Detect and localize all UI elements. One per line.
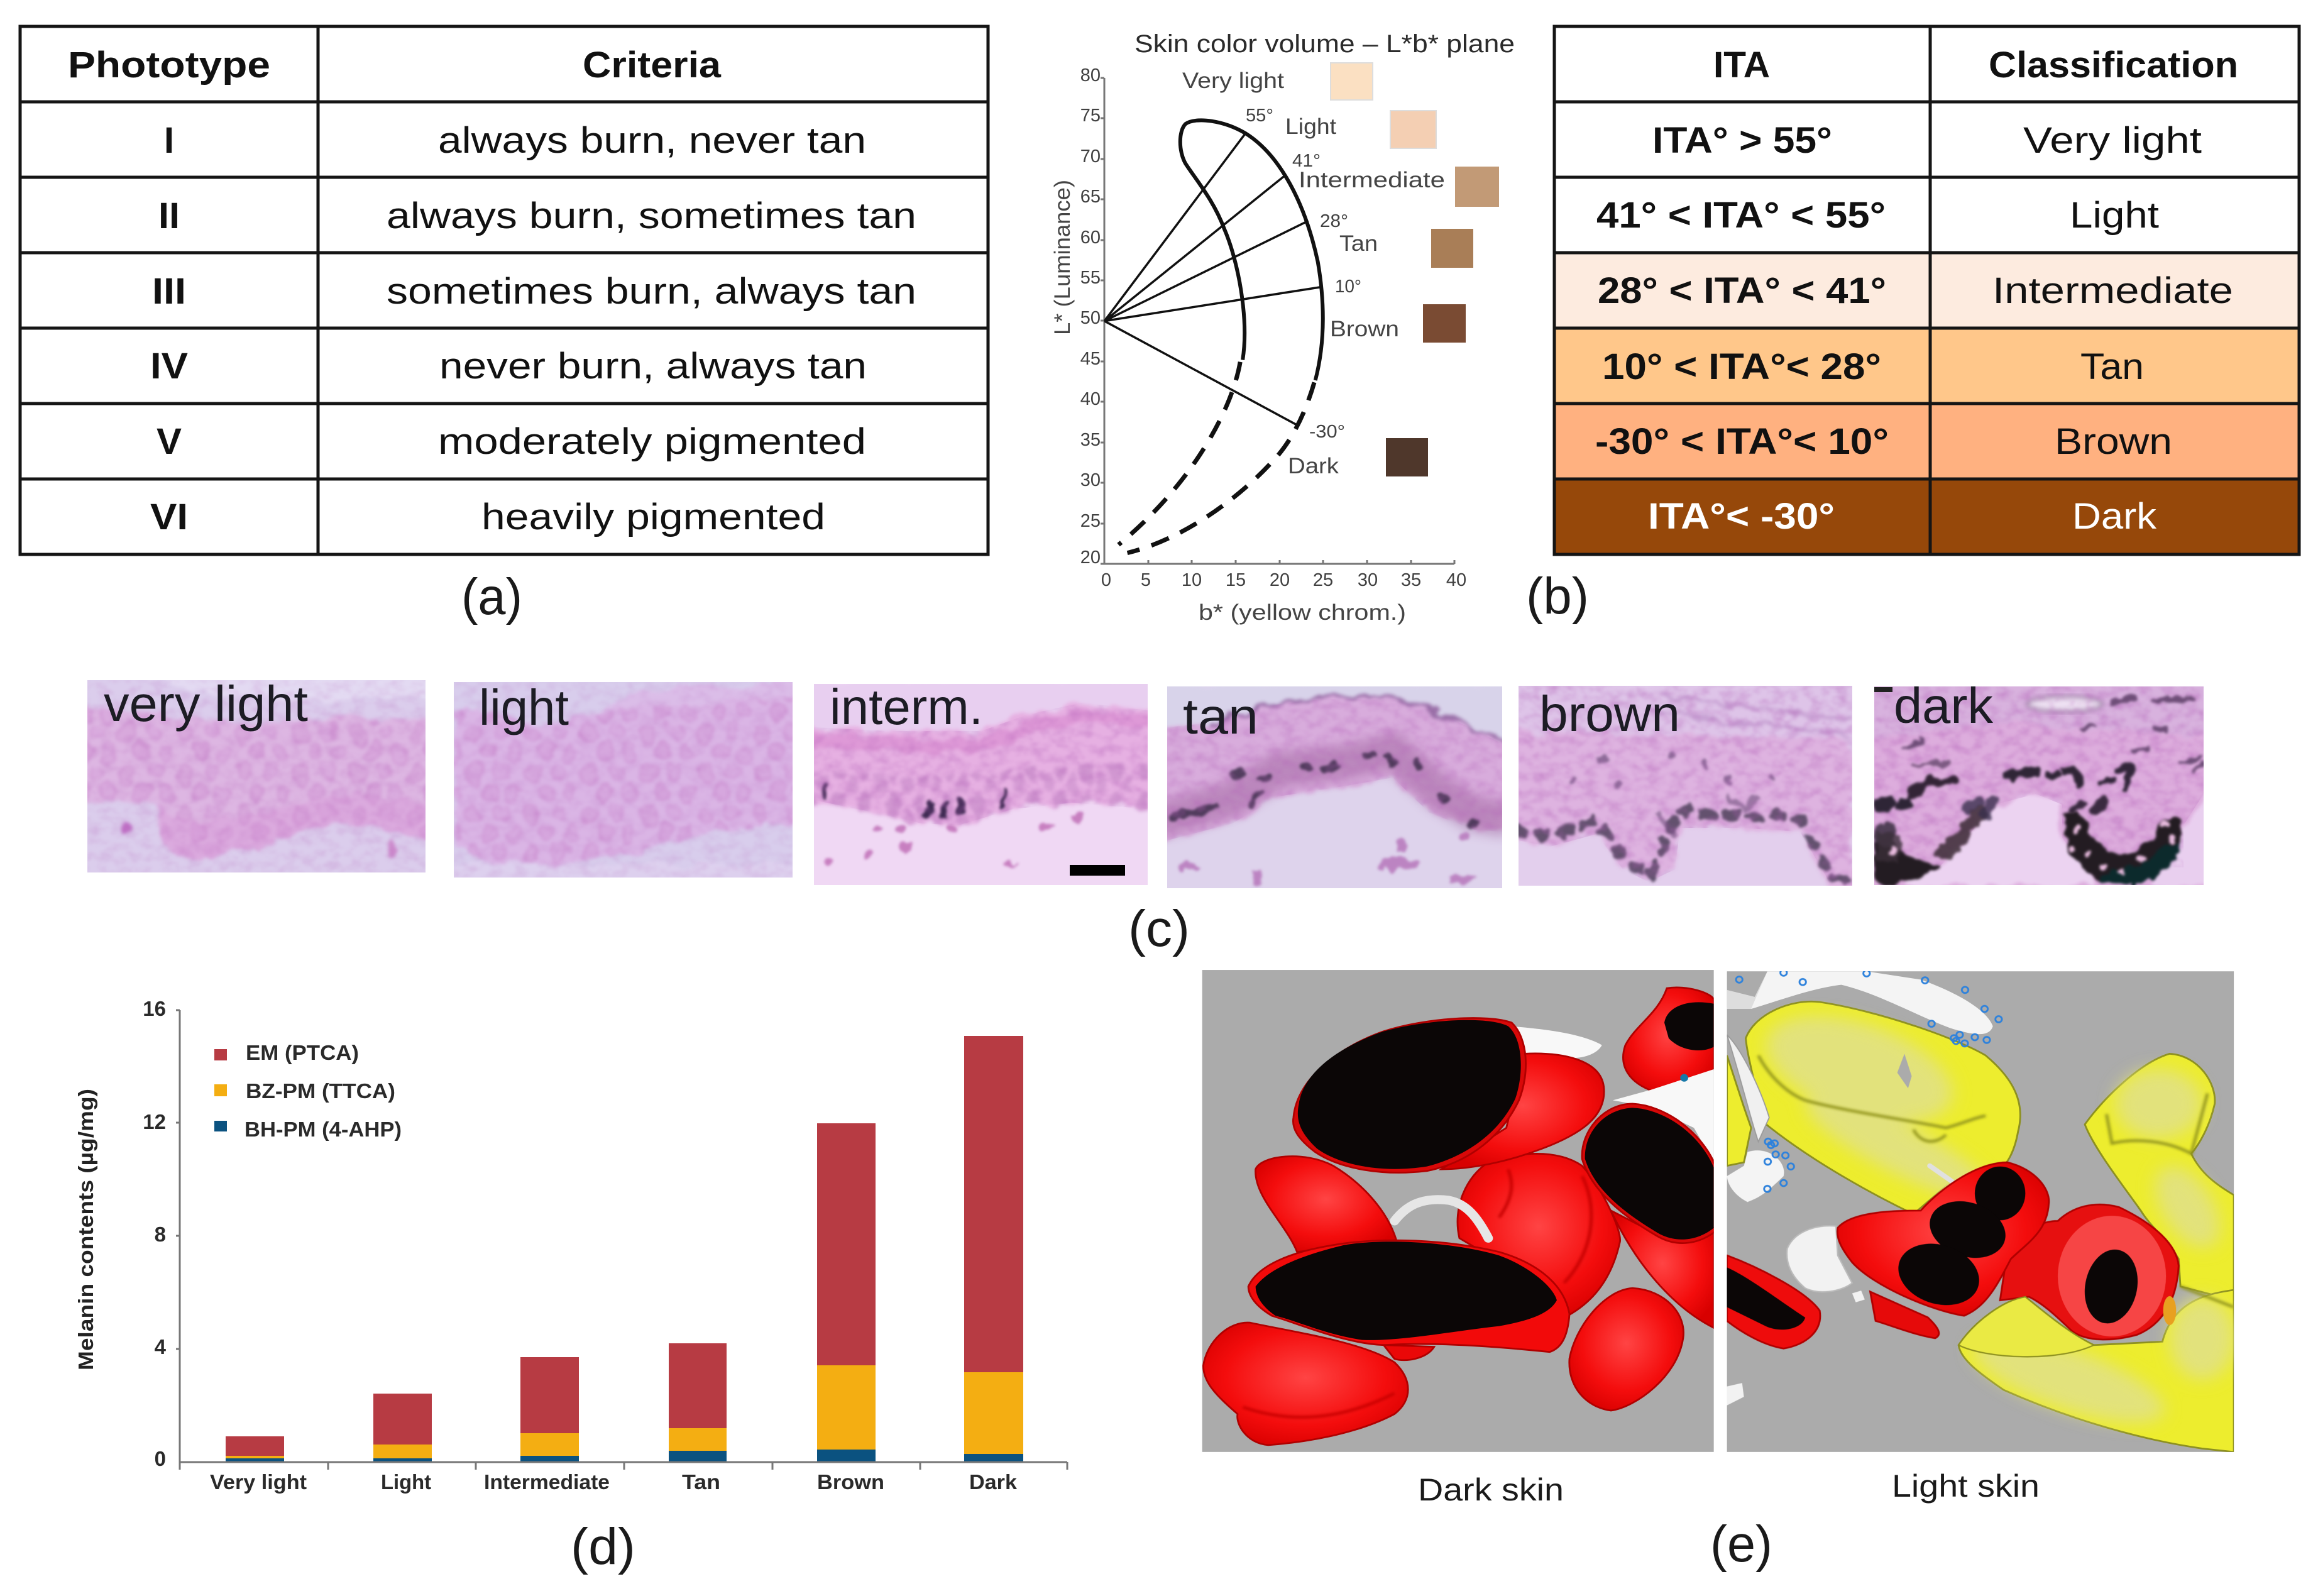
category and angle labels: [1182, 69, 1445, 478]
row: dark: [1648, 496, 2157, 537]
legend: [214, 1041, 402, 1141]
y axis tick labels: 75: [1080, 106, 1101, 126]
bar: Light: [373, 1394, 432, 1462]
row III: III: [152, 271, 186, 312]
row V: V: [157, 421, 182, 462]
row: intermediate: 28° < ITA° < 41°: [1598, 270, 1886, 311]
y axis tick labels: 4: [155, 1335, 167, 1358]
category and angle labels: Light: [1285, 114, 1336, 139]
chart title: Skin color volume – L*b* plane: [1134, 30, 1515, 58]
y axis tick labels: 70: [1080, 146, 1101, 167]
x axis tick labels: 10: [1182, 570, 1202, 590]
category labels: Light: [381, 1470, 431, 1494]
caption (e): (e): [1710, 1516, 1772, 1573]
label: Dark skin: Dark skin: [1418, 1472, 1564, 1507]
table header: Phototype: Phototype: [68, 45, 270, 85]
category labels: Very light: [210, 1470, 307, 1494]
category and angle labels: 41°: [1292, 151, 1321, 171]
x axis tick labels: 0: [1101, 570, 1111, 590]
x axis tick labels: 30: [1358, 570, 1378, 590]
row: tan: Tan: [2080, 346, 2144, 387]
row: brown: [1595, 421, 2172, 462]
category labels: Tan: [682, 1470, 720, 1494]
y axis tick labels: 20: [1080, 548, 1101, 568]
label: very light: very light: [104, 676, 308, 732]
label: dark: dark: [1894, 678, 1994, 734]
y axis tick labels: 65: [1080, 187, 1101, 207]
row: very light: [1652, 120, 2202, 161]
row: very light: Very light: [2023, 120, 2202, 161]
category and angle labels: Very light: [1182, 69, 1284, 93]
y axis tick labels: 30: [1080, 470, 1101, 490]
category labels: Dark: [969, 1470, 1018, 1494]
category labels: [210, 1470, 1018, 1494]
category and angle labels: Brown: [1330, 317, 1399, 341]
y axis tick labels: [143, 997, 167, 1470]
category labels: Intermediate: [484, 1470, 610, 1494]
row VI: VI: [150, 497, 188, 537]
bar: Brown: [817, 1123, 876, 1462]
row: light: 41° < ITA° < 55°: [1596, 195, 1886, 236]
y axis tick labels: 35: [1080, 430, 1101, 450]
x axis title: b* (yellow chrom.): [1199, 600, 1406, 625]
row: light: Light: [2070, 195, 2159, 236]
y axis tick labels: 16: [143, 997, 166, 1020]
row: intermediate: [1598, 270, 2233, 311]
caption (c): (c): [1128, 900, 1190, 957]
row V: moderately pigmented: [438, 421, 866, 462]
row: light: [1596, 195, 2159, 236]
category and angle labels: 55°: [1246, 106, 1273, 126]
x axis tick labels: [1101, 570, 1466, 590]
x axis tick labels: 35: [1401, 570, 1421, 590]
panel (c): histology image, tan: [1160, 682, 1508, 893]
row II: II: [158, 195, 180, 236]
table header: Criteria: Criteria: [583, 45, 722, 85]
skin tone swatches: [1331, 63, 1499, 476]
axes: [176, 1010, 1067, 1470]
y axis tick labels: [1080, 65, 1101, 568]
legend: BH-PM (4-AHP): [244, 1118, 402, 1141]
category and angle labels: Dark: [1288, 454, 1339, 478]
row: dark: ITA°< -30°: [1648, 496, 1835, 537]
row: brown: -30° < ITA°< 10°: [1595, 421, 1889, 462]
row III: [152, 271, 916, 312]
legend: BZ-PM (TTCA): [246, 1079, 395, 1103]
x axis tick labels: 5: [1141, 570, 1151, 590]
category and angle labels: Intermediate: [1299, 168, 1445, 192]
row IV: never burn, always tan: [439, 346, 867, 387]
row V: [157, 421, 866, 462]
x axis tick labels: 40: [1446, 570, 1466, 590]
row IV: IV: [150, 346, 188, 387]
row I: [164, 120, 866, 161]
row VI: heavily pigmented: [481, 497, 825, 537]
row: intermediate: Intermediate: [1992, 270, 2233, 311]
row: very light: ITA° > 55°: [1652, 120, 1832, 161]
panel (b): ITA classification table: [1554, 26, 2299, 554]
panel (b): skin color volume chart: [1050, 30, 1515, 625]
caption (a): (a): [461, 568, 522, 625]
panel (c): histology image, intermediate: [808, 679, 1153, 889]
axes: [1101, 78, 1454, 564]
y axis tick labels: 60: [1080, 228, 1101, 248]
y axis title: L* (Luminance): [1050, 180, 1075, 335]
category and angle labels: Tan: [1339, 231, 1378, 256]
category and angle labels: 28°: [1320, 211, 1348, 231]
panel (e): light skin 3D render: [1727, 969, 2234, 1452]
y axis tick labels: 50: [1080, 308, 1101, 328]
caption (d): (d): [571, 1518, 635, 1575]
legend: EM (PTCA): [246, 1041, 359, 1064]
header row: [1713, 45, 2238, 85]
category and angle labels: 10°: [1335, 277, 1361, 297]
row VI: [150, 497, 825, 537]
bar: Very light: [226, 1436, 284, 1462]
panel (a): phototype table: [20, 26, 988, 554]
yellow structures: [1727, 995, 2234, 1452]
row I: always burn, never tan: [438, 120, 866, 161]
row II: [158, 195, 916, 236]
y axis tick labels: 12: [143, 1110, 166, 1133]
y axis tick labels: 8: [155, 1223, 166, 1246]
row: brown: Brown: [2055, 421, 2172, 462]
y axis tick labels: 40: [1080, 389, 1101, 409]
scale tick: [1874, 687, 1892, 692]
y axis tick labels: 25: [1080, 511, 1101, 531]
label: interm.: interm.: [830, 679, 983, 735]
y axis tick labels: 0: [155, 1447, 166, 1470]
row II: always burn, sometimes tan: [387, 195, 916, 236]
row: dark: Dark: [2072, 496, 2157, 537]
header row: ITA: [1713, 45, 1770, 85]
caption (b): (b): [1526, 568, 1589, 625]
y axis tick labels: 45: [1080, 349, 1101, 369]
panel (c): histology image, light: [449, 679, 801, 883]
label: light: light: [479, 680, 569, 735]
x axis tick labels: 20: [1270, 570, 1290, 590]
row I: I: [164, 120, 174, 161]
row IV: [150, 346, 867, 387]
y axis tick labels: 55: [1080, 268, 1101, 288]
label: tan: tan: [1183, 688, 1258, 744]
label: Light skin: Light skin: [1892, 1468, 2040, 1504]
category labels: Brown: [817, 1470, 884, 1494]
scale bar: [1070, 865, 1125, 876]
bar: Intermediate: [520, 1357, 579, 1462]
row: tan: [1602, 346, 2144, 387]
x axis tick labels: 25: [1313, 570, 1333, 590]
y axis tick labels: 80: [1080, 65, 1101, 85]
bar: Dark: [964, 1036, 1023, 1462]
label: brown: brown: [1539, 686, 1680, 742]
ITA curves and rays: [1104, 120, 1323, 553]
category and angle labels: -30°: [1309, 422, 1345, 442]
panel (e): dark skin 3D render: [1202, 970, 1716, 1452]
row: tan: 10° < ITA°< 28°: [1602, 346, 1881, 387]
panel (c): histology image, dark: [1870, 678, 2212, 889]
x axis tick labels: 15: [1226, 570, 1246, 590]
header row: Classification: [1989, 45, 2238, 85]
bar: Tan: [669, 1343, 727, 1462]
panel (d): melanin stacked bar chart: [74, 997, 1067, 1494]
row III: sometimes burn, always tan: [387, 271, 916, 312]
y axis title: Melanin contents (µg/mg): [74, 1089, 97, 1370]
panel (c): histology image, very light: [82, 676, 434, 877]
panel (c): histology image, brown: [1515, 682, 1857, 889]
